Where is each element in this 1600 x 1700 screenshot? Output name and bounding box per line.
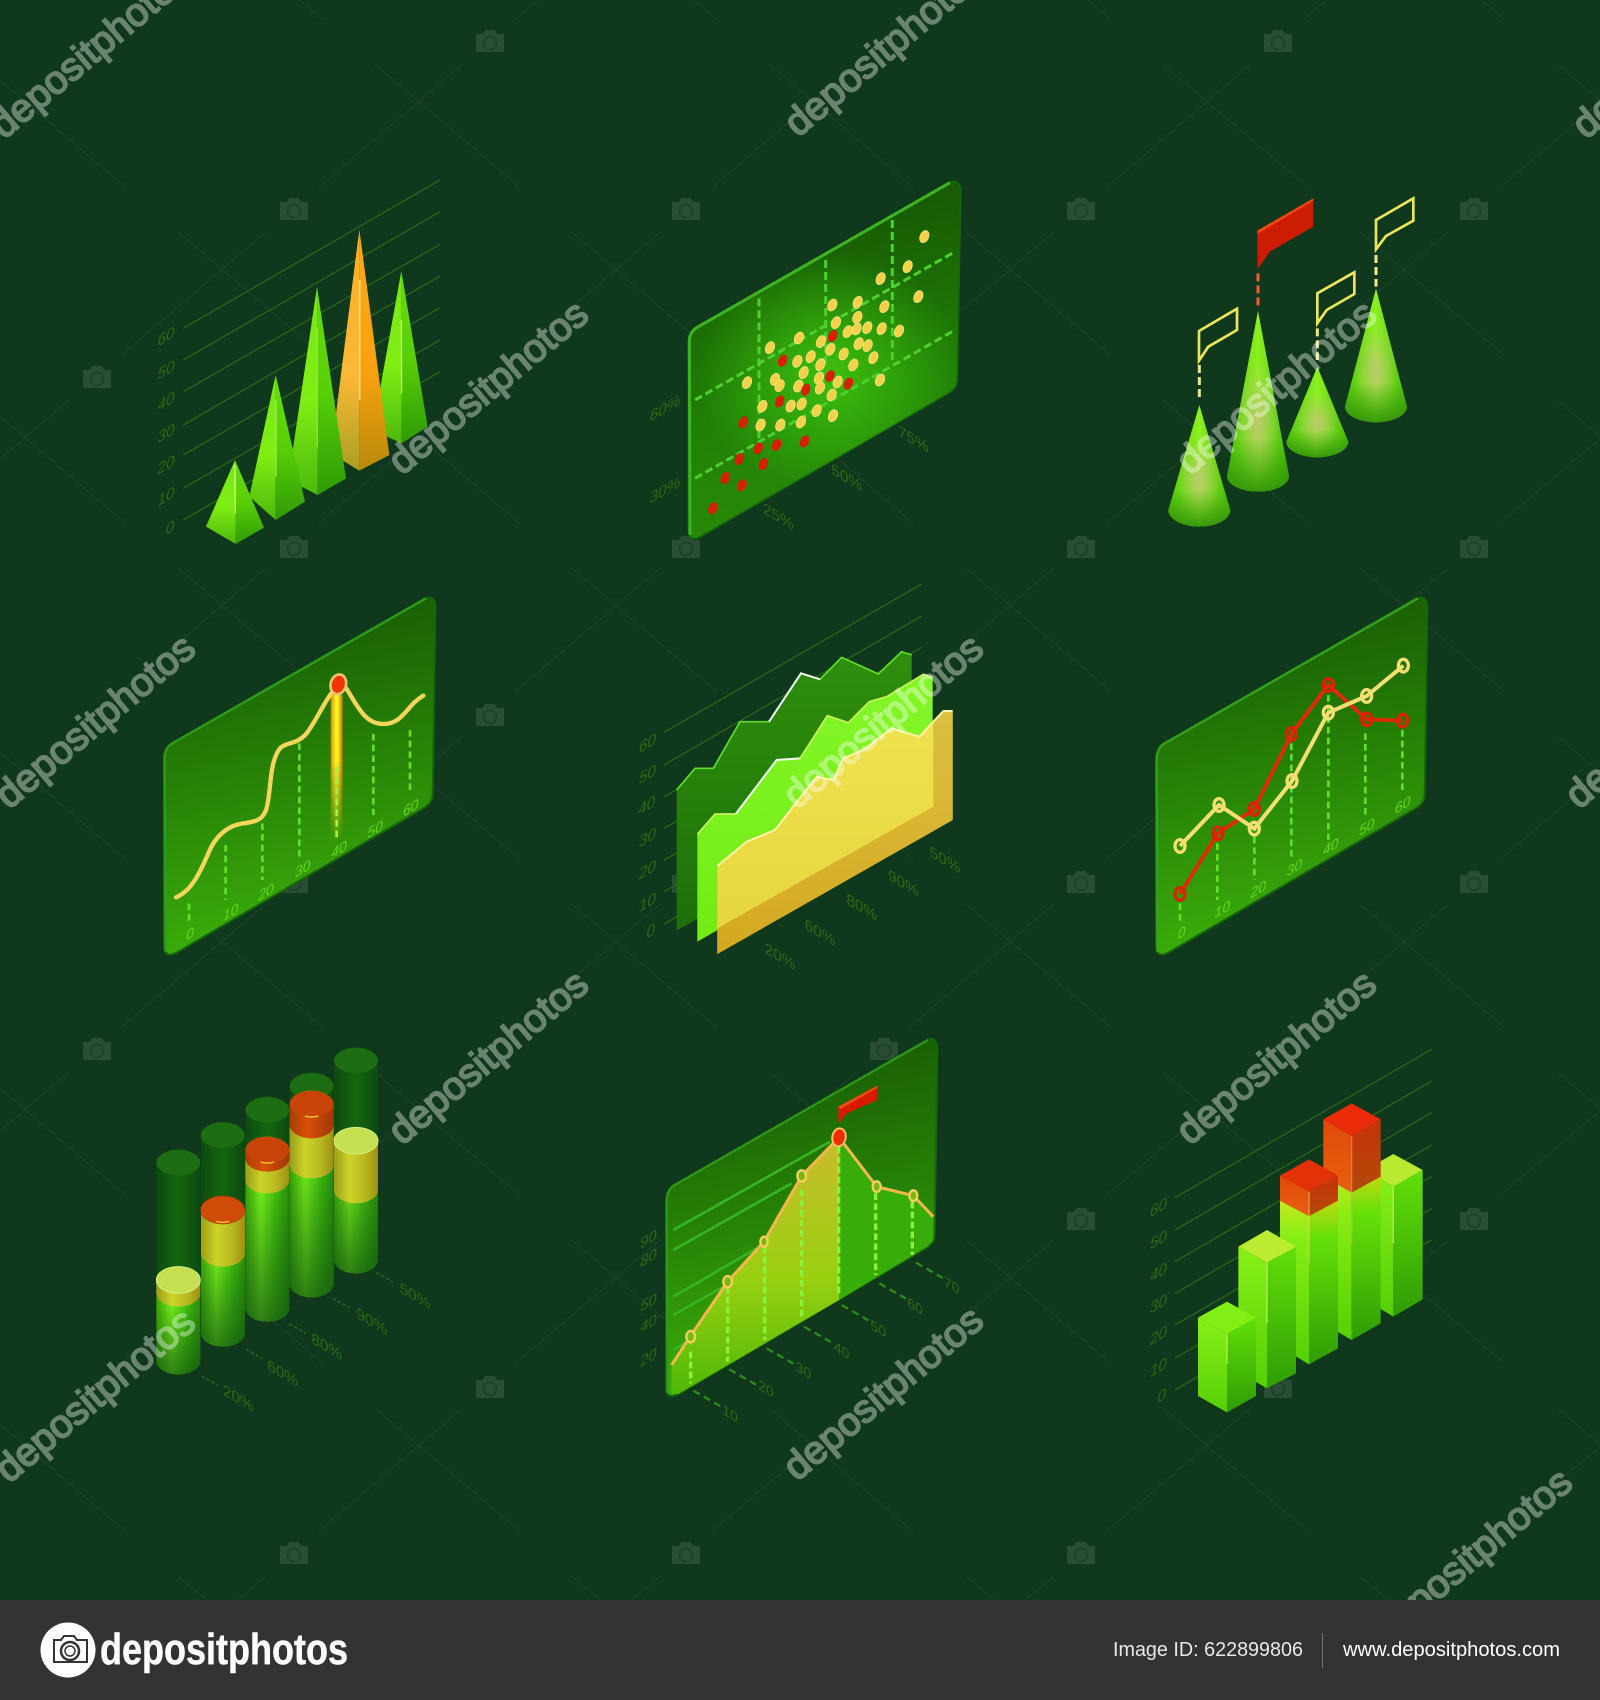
front area bbox=[717, 711, 953, 954]
bottom axis: 40 bbox=[834, 1338, 849, 1363]
pyramid 3 bbox=[288, 287, 346, 495]
website: www.depositphotos.com bbox=[1342, 1639, 1560, 1661]
axis labels: 50 bbox=[639, 760, 657, 788]
outline flags bbox=[1199, 198, 1413, 361]
card bbox=[164, 598, 435, 955]
watermark text: depositphotos bbox=[380, 962, 596, 1153]
green area right of peak bbox=[839, 1137, 933, 1300]
bar 1 bbox=[1198, 1302, 1256, 1412]
bar 3 bbox=[1280, 1159, 1338, 1364]
axis labels: 0 bbox=[166, 516, 175, 539]
bottom axis bbox=[693, 1263, 959, 1427]
axis labels: 30 bbox=[1287, 855, 1303, 881]
bar 2 bbox=[1238, 1230, 1296, 1388]
red dots bbox=[706, 328, 855, 516]
cylinder 2 bbox=[201, 1122, 245, 1347]
watermark text: depositphotos bbox=[775, 1298, 991, 1489]
axis labels: 40 bbox=[157, 387, 175, 415]
cylinder 4 bbox=[290, 1073, 334, 1297]
left axis labels: 80 bbox=[640, 1246, 657, 1271]
watermark camera icons bbox=[83, 30, 1488, 1564]
left axis labels bbox=[639, 1227, 657, 1371]
axis labels: 40 bbox=[1323, 834, 1339, 860]
axis labels: 30 bbox=[295, 856, 311, 882]
left axis labels: 20 bbox=[639, 1345, 657, 1371]
axis labels: 30 bbox=[1150, 1290, 1168, 1318]
axis labels: 20 bbox=[257, 880, 274, 905]
axis labels: 20 bbox=[638, 856, 657, 884]
axis labels: 20 bbox=[1250, 877, 1267, 903]
watermark text: depositphotos bbox=[1168, 292, 1384, 483]
yellow dots bbox=[740, 229, 931, 433]
watermark text: depositphotos bbox=[775, 626, 991, 817]
axis labels: 75% bbox=[898, 422, 929, 457]
axis labels: 10 bbox=[157, 482, 175, 510]
card bbox=[688, 181, 963, 539]
panel: area line card with flag bbox=[639, 1039, 959, 1427]
peak marker bbox=[831, 1127, 847, 1147]
panel: two-line card bbox=[1156, 598, 1427, 955]
axis ticks and labels: 50% bbox=[400, 1278, 431, 1314]
inner grid lines bbox=[673, 1142, 830, 1350]
axis labels: 0 bbox=[1157, 1384, 1167, 1407]
dashed stems bbox=[1199, 255, 1376, 400]
footer bar bbox=[0, 1600, 1600, 1700]
axis labels bbox=[1178, 793, 1411, 943]
axis labels: 30% bbox=[650, 472, 680, 508]
axis labels: 60% bbox=[805, 915, 836, 950]
bottom axis: 70 bbox=[944, 1273, 959, 1298]
pyramid 5 bbox=[373, 271, 428, 443]
panel: scatter plot card bbox=[650, 181, 963, 539]
axis labels: 0 bbox=[646, 919, 656, 942]
bottom axis: 60 bbox=[907, 1294, 923, 1319]
cone 1 bbox=[1168, 405, 1230, 527]
watermark text: depositphotos bbox=[380, 292, 596, 483]
bottom axis: 10 bbox=[722, 1402, 738, 1427]
axis labels: 60% bbox=[650, 391, 680, 426]
bar 5 bbox=[1365, 1154, 1423, 1317]
left axis labels: 50 bbox=[640, 1290, 657, 1316]
bar 4 bbox=[1323, 1103, 1381, 1340]
axis labels bbox=[157, 322, 175, 539]
watermark text: depositphotos bbox=[1364, 1460, 1580, 1651]
pyramid 4 orange bbox=[331, 229, 389, 471]
image id: Image ID: 622899806 bbox=[1113, 1639, 1303, 1661]
axis ticks and labels: 90% bbox=[356, 1304, 387, 1339]
red flag bbox=[1257, 198, 1313, 269]
axis labels: 60 bbox=[1150, 1193, 1168, 1221]
axis labels: 0 bbox=[1178, 923, 1186, 943]
axis labels: 30 bbox=[639, 823, 657, 851]
curve bbox=[176, 685, 423, 897]
cone 3 bbox=[1286, 367, 1348, 457]
axis labels: 60 bbox=[157, 322, 175, 350]
axis labels: 50 bbox=[1150, 1226, 1168, 1254]
panel: isometric bar chart bbox=[1149, 1049, 1432, 1412]
cone 4 bbox=[1345, 288, 1407, 422]
axis labels: 20 bbox=[157, 451, 175, 479]
panel: smooth line card bbox=[164, 598, 435, 955]
axis labels: 40 bbox=[331, 837, 347, 862]
pyramid 2 bbox=[249, 375, 305, 520]
axis labels: 50 bbox=[367, 817, 383, 842]
cylinder 3 bbox=[245, 1097, 289, 1322]
axis labels bbox=[638, 729, 961, 974]
yellow line bbox=[1175, 659, 1408, 852]
watermark text: depositphotos bbox=[1168, 962, 1384, 1153]
axis labels: 80% bbox=[846, 890, 877, 925]
back area bbox=[677, 652, 912, 931]
axis labels: 40 bbox=[638, 791, 656, 819]
logo text: depositphotos bbox=[100, 1625, 348, 1674]
left axis labels: 40 bbox=[640, 1311, 657, 1337]
panel: cylinder chart bbox=[156, 1047, 431, 1416]
axis labels: 50 bbox=[1359, 815, 1375, 840]
axis labels: 60 bbox=[1395, 793, 1411, 818]
dashes bbox=[691, 1147, 912, 1383]
axis labels bbox=[186, 795, 419, 944]
axis labels: 0 bbox=[186, 924, 194, 944]
axis labels: 90% bbox=[888, 866, 919, 901]
axis labels: 40 bbox=[1150, 1258, 1168, 1286]
bottom axis: 20 bbox=[758, 1377, 774, 1402]
left axis labels: 90 bbox=[640, 1227, 657, 1252]
pyramid 1 bbox=[206, 460, 264, 544]
middle area bbox=[697, 674, 933, 942]
axis labels: 20 bbox=[1149, 1321, 1168, 1350]
card bbox=[666, 1039, 937, 1396]
axis labels: 60 bbox=[639, 729, 657, 757]
peak bar bbox=[331, 695, 343, 843]
panel: pyramid chart bbox=[157, 180, 440, 544]
axis ticks and labels: 20% bbox=[223, 1381, 254, 1416]
axis labels: 60 bbox=[403, 795, 419, 821]
dashed grid bbox=[695, 220, 955, 478]
axis labels bbox=[650, 391, 929, 534]
axis labels: 50% bbox=[930, 842, 961, 878]
cylinder 5 bbox=[334, 1047, 378, 1273]
axis labels: 25% bbox=[763, 499, 794, 534]
yellow area left of peak bbox=[672, 1137, 839, 1394]
axis labels: 10 bbox=[1150, 1353, 1168, 1381]
red flag bbox=[838, 1086, 877, 1124]
cone 2 bbox=[1227, 311, 1289, 492]
bottom axis: 50 bbox=[871, 1317, 886, 1342]
axis ticks and labels: 60% bbox=[267, 1356, 298, 1391]
axis labels: 10 bbox=[223, 900, 239, 925]
axis labels: 50% bbox=[831, 460, 862, 495]
axis labels: 20% bbox=[765, 939, 796, 974]
axis labels: 10 bbox=[1215, 897, 1231, 922]
dashes bbox=[1180, 695, 1402, 923]
card bbox=[1156, 598, 1427, 955]
axis labels: 10 bbox=[639, 888, 657, 916]
dashes bbox=[189, 730, 410, 923]
axis ticks and labels: 80% bbox=[311, 1329, 342, 1364]
axis labels: 50 bbox=[157, 356, 175, 384]
panel: layered area chart bbox=[638, 584, 961, 974]
axis labels: 30 bbox=[157, 419, 175, 447]
peak marker bbox=[328, 673, 348, 696]
red line bbox=[1175, 679, 1408, 900]
axis ticks and labels bbox=[202, 1273, 431, 1416]
line with points bbox=[672, 1137, 933, 1365]
cylinder 1 bbox=[156, 1149, 200, 1374]
logo icon bbox=[40, 1622, 96, 1678]
panel: cones with flags bbox=[1168, 198, 1413, 527]
bottom axis: 30 bbox=[796, 1358, 811, 1383]
axis labels bbox=[1149, 1193, 1168, 1407]
